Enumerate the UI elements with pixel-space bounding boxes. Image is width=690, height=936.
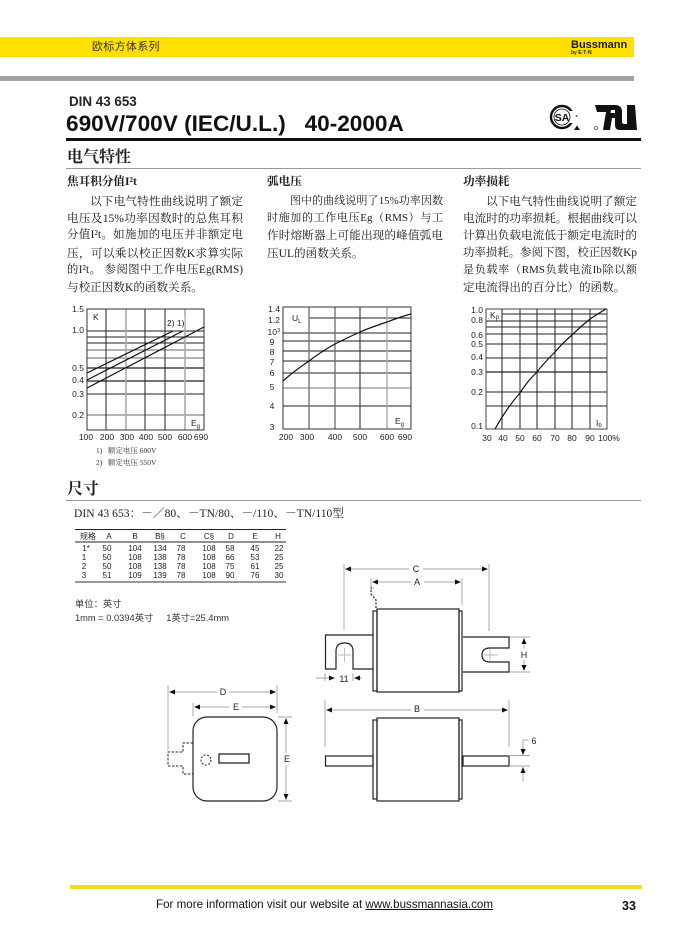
table rows: 45 [251, 544, 260, 553]
axis labels: 0.4 [72, 375, 84, 385]
drawing: fuse end view [168, 685, 292, 802]
model designation line: DIN 43 653：－／80、－TN/80、－/110、－TN/110型 [74, 507, 344, 520]
column body: 分值I²t。如施加的电压并非额定电 [67, 229, 243, 241]
table rows: 50 [103, 553, 112, 562]
dimension labels: B [414, 704, 420, 714]
table rows: 51 [103, 571, 112, 580]
table header: A [106, 532, 112, 541]
table rows: 109 [128, 571, 142, 580]
axis labels: 30 [482, 433, 492, 443]
column body [463, 195, 637, 294]
page number: 33 [622, 899, 636, 913]
brand logo: Bussmann by Eaton: by E·T·N [571, 50, 592, 56]
axis labels: K [490, 310, 496, 320]
footer website note: For more information visit our website at www.bussmannasia.com [156, 898, 493, 911]
table rows: 1 [82, 553, 87, 562]
axis labels: 500 [353, 432, 367, 442]
chart: UL vs Eg [267, 304, 412, 442]
column body: 时施加的工作电压Eg（RMS）与工 [267, 212, 443, 224]
table rows: 30 [275, 571, 284, 580]
table header: B [132, 532, 138, 541]
grey divider bar [0, 76, 634, 81]
column body: 定电流得出的百分比）的函数。 [463, 281, 625, 294]
column body [67, 195, 243, 294]
table header: B§ [155, 532, 165, 541]
table rows: 78 [177, 571, 186, 580]
axis labels: 8 [270, 347, 275, 357]
section rule [66, 168, 641, 169]
axis labels: 200 [100, 432, 114, 442]
table header: D [228, 532, 234, 541]
footer yellow rule [70, 885, 642, 889]
axis labels: 1.5 [72, 304, 84, 314]
table rows: 78 [177, 562, 186, 571]
axis labels: g [401, 422, 404, 428]
chart: Kp vs Ib [471, 305, 620, 443]
axis labels: 5 [270, 382, 275, 392]
column body: 电压及15%功率因数时的总焦耳积 [67, 212, 243, 225]
column body: 作时熔断器上可能出现的峰值弧电 [267, 229, 443, 242]
axis labels: 3 [270, 422, 275, 432]
column body: 以下电气特性曲线说明了额定 [90, 195, 243, 208]
icon: UL recognized mark [594, 105, 637, 130]
table rows: 66 [226, 553, 235, 562]
axis labels: I [596, 418, 598, 428]
text column: power loss [463, 175, 637, 294]
axis labels: 0.2 [72, 410, 84, 420]
column heading: 功率损耗 [463, 175, 509, 188]
column body: 与校正因数K的函数关系。 [67, 281, 203, 294]
table rows: 108 [128, 553, 142, 562]
column body: 的I²t。 参阅图中工作电压Eg(RMS) [67, 264, 243, 276]
axis labels [471, 305, 620, 443]
axis labels: 500 [158, 432, 172, 442]
table rows: 1* [82, 544, 90, 553]
column body: 以下电气特性曲线说明了额定 [486, 195, 637, 208]
icon: CSA mark: SA [555, 112, 570, 124]
table rows: 50 [103, 544, 112, 553]
dimension labels: E [233, 702, 239, 712]
table header: C [180, 532, 186, 541]
table rows: 108 [128, 562, 142, 571]
axis labels: 0.3 [72, 389, 84, 399]
axis labels: U [292, 313, 298, 323]
units note: 单位：英寸 [75, 599, 122, 609]
drawing: fuse side view [324, 700, 537, 802]
dimension labels [414, 704, 537, 746]
axis labels: 690 [398, 432, 412, 442]
curve [495, 309, 606, 429]
axis labels: 600 [380, 432, 394, 442]
axis labels: 0.1 [471, 421, 483, 431]
table rows: 58 [226, 544, 235, 553]
chart notes [96, 446, 156, 467]
table rows: 134 [153, 544, 167, 553]
table rows: 61 [251, 562, 260, 571]
chart notes: 2) 额定电压 550V [96, 458, 156, 467]
table rows: 76 [251, 571, 260, 580]
table rows [82, 544, 284, 580]
chart notes: 1) 额定电压 600V [96, 446, 156, 455]
axis labels: 2) 1) [167, 318, 185, 328]
column body: 是负载率（RMS负载电流Ib除以额 [463, 264, 637, 276]
table rows: 108 [202, 562, 216, 571]
axis labels: 9 [270, 337, 275, 347]
axis labels: 40 [498, 433, 508, 443]
drawing: fuse top view [316, 564, 530, 693]
dimension labels: 6 [531, 736, 537, 746]
column body: 压UL的函数关系。 [267, 247, 364, 260]
axis labels: 400 [139, 432, 153, 442]
axis labels: 1.2 [268, 315, 280, 325]
axis labels: E [191, 418, 197, 428]
axis labels: 6 [270, 368, 275, 378]
product standard: DIN 43 653 [69, 94, 137, 109]
axis labels: 60 [532, 433, 542, 443]
axis labels: 1.0 [72, 325, 84, 335]
axis labels: 80 [567, 433, 577, 443]
column body [267, 194, 443, 260]
table rows: 108 [202, 571, 216, 580]
table rows: 75 [226, 562, 235, 571]
dimension labels: 11 [339, 674, 349, 684]
dimension labels: H [521, 650, 527, 660]
column body: 压，可以乘以校正因数K求算实际 [67, 247, 243, 260]
axis labels: 0.2 [471, 387, 483, 397]
curve [283, 314, 411, 381]
column body: 功率损耗。参阅下图，校正因数Kp [463, 247, 637, 259]
axis labels: 0.5 [471, 339, 483, 349]
table rows: 108 [202, 553, 216, 562]
axis labels: 7 [270, 357, 275, 367]
table header: E [252, 532, 258, 541]
dimension lines [316, 564, 530, 681]
section heading: dimensions: 尺寸 [67, 481, 99, 498]
dimensions table [75, 529, 286, 583]
axis labels: 100% [598, 433, 620, 443]
table rows: 50 [103, 562, 112, 571]
column body: 图中的曲线说明了15%功率因数 [290, 195, 443, 207]
column heading: 弧电压 [267, 175, 302, 188]
main title: 690V/700V (IEC/U.L.) 40-2000A [66, 111, 404, 136]
axis labels: 3 [277, 328, 280, 334]
table rows: 78 [177, 553, 186, 562]
table rows: 139 [153, 571, 167, 580]
axis labels: E [395, 416, 401, 426]
axis labels: 0.3 [471, 367, 483, 377]
text column: I2t [67, 175, 243, 294]
dimension labels: D [220, 687, 227, 697]
black heading rule [66, 138, 641, 141]
header band: yellow bar [0, 37, 634, 57]
column heading: 焦耳积分值I²t [67, 175, 137, 188]
axis labels: 90 [585, 433, 595, 443]
axis labels: g [197, 424, 200, 430]
axis labels: 690 [194, 432, 208, 442]
column body: 计算出负载电流低于额定电流时的 [463, 229, 637, 242]
axis labels: 70 [550, 433, 560, 443]
axis labels: 300 [120, 432, 134, 442]
table rows: 138 [153, 562, 167, 571]
table header [80, 531, 281, 541]
table header: C§ [204, 532, 214, 541]
chart: K vs Eg [72, 304, 208, 442]
axis labels: K [93, 312, 99, 322]
dimension labels [220, 687, 290, 764]
table rows: 2 [82, 562, 87, 571]
section rule [66, 500, 641, 501]
axis labels: L [298, 319, 302, 325]
axis labels: 0.6 [471, 330, 483, 340]
axis labels [72, 304, 208, 442]
axis labels: p [496, 315, 500, 321]
units note [75, 599, 229, 623]
brand logo: Bussmann by Eaton: Bussmann [571, 39, 627, 51]
dimension labels: A [414, 577, 420, 587]
axis labels: 100 [79, 432, 93, 442]
axis labels: 4 [270, 401, 275, 411]
axis labels: 10 [267, 327, 277, 337]
icon: CSA mark [550, 104, 580, 130]
units note: 1mm = 0.0394英寸 1英寸=25.4mm [75, 613, 229, 623]
table rows: 25 [275, 562, 284, 571]
table rows: 3 [82, 571, 87, 580]
axis labels: 50 [515, 433, 525, 443]
table rows: 108 [202, 544, 216, 553]
section heading: electrical characteristics: 电气特性 [67, 149, 131, 166]
axis labels [267, 304, 412, 442]
text column: arc voltage [267, 175, 443, 260]
axis labels: 1.4 [268, 304, 280, 314]
column body: 电流时的功率损耗。根据曲线可以 [463, 212, 637, 225]
curves [87, 327, 204, 388]
series title: 欧标方体系列 [92, 41, 160, 53]
dimension labels: C [413, 564, 420, 574]
table rows: 53 [251, 553, 260, 562]
axis labels: 0.8 [471, 315, 483, 325]
axis labels: 200 [279, 432, 293, 442]
table header: H [275, 532, 281, 541]
table header: 规格 [80, 531, 96, 541]
axis labels: 600 [178, 432, 192, 442]
axis labels: 1.0 [471, 305, 483, 315]
axis labels: 300 [300, 432, 314, 442]
table rows: 90 [226, 571, 235, 580]
table rows: 104 [128, 544, 142, 553]
dimension lines [325, 700, 530, 781]
dimension labels [339, 564, 527, 684]
axis labels: 400 [328, 432, 342, 442]
dimension lines [168, 685, 292, 801]
axis labels: 0.4 [471, 352, 483, 362]
dimension labels: E [284, 754, 290, 764]
table rows: 138 [153, 553, 167, 562]
table rows: 78 [177, 544, 186, 553]
table rows: 25 [275, 553, 284, 562]
table rows: 22 [275, 544, 284, 553]
axis labels: 0.5 [72, 363, 84, 373]
axis labels: b [598, 423, 602, 429]
